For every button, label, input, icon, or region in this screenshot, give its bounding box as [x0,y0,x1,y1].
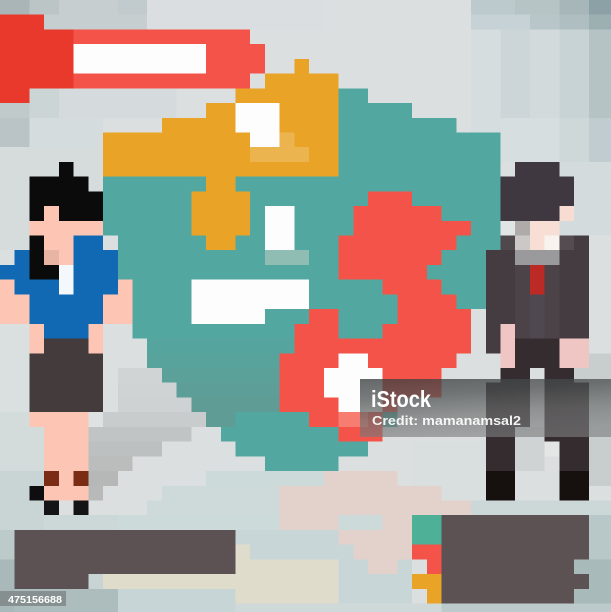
red map blob [280,191,471,442]
man trousers [486,339,589,471]
image id tag [0,591,66,606]
watermark band [360,379,611,437]
man hands [500,324,589,368]
man face [500,206,574,250]
man red tie [530,265,545,294]
banner text bar [74,44,206,74]
teal shield [103,88,500,471]
bottom-right dark text box [442,515,589,604]
woman skin [0,206,132,500]
man collar [515,250,559,265]
orange crown and shield crest [103,59,339,250]
watermark logo text: iStock [371,386,431,412]
woman collar [59,265,74,294]
woman blue blouse [0,236,118,339]
man leg gap [515,368,559,471]
colour legend swatches [412,515,442,604]
character shadow [88,368,206,500]
beige floor patch [103,545,339,604]
pink floor patch [280,471,471,574]
bottom-left dark text box [15,530,236,589]
woman skirt [29,339,103,412]
image id tag: 475156688 [8,595,62,606]
white medical cross [324,353,383,427]
red title banner [0,15,265,103]
woman shoes [29,471,88,515]
woman hair [29,162,103,280]
man boots [486,471,589,500]
watermark credit text: Credit: mamanamsal2 [372,413,521,428]
man jacket [486,236,589,353]
white shield label block [265,206,309,265]
man bowler hat [500,162,574,221]
woman figure [0,162,132,515]
white shield text bar [191,280,309,324]
businessman figure [486,162,589,500]
crown highlight [236,103,309,162]
